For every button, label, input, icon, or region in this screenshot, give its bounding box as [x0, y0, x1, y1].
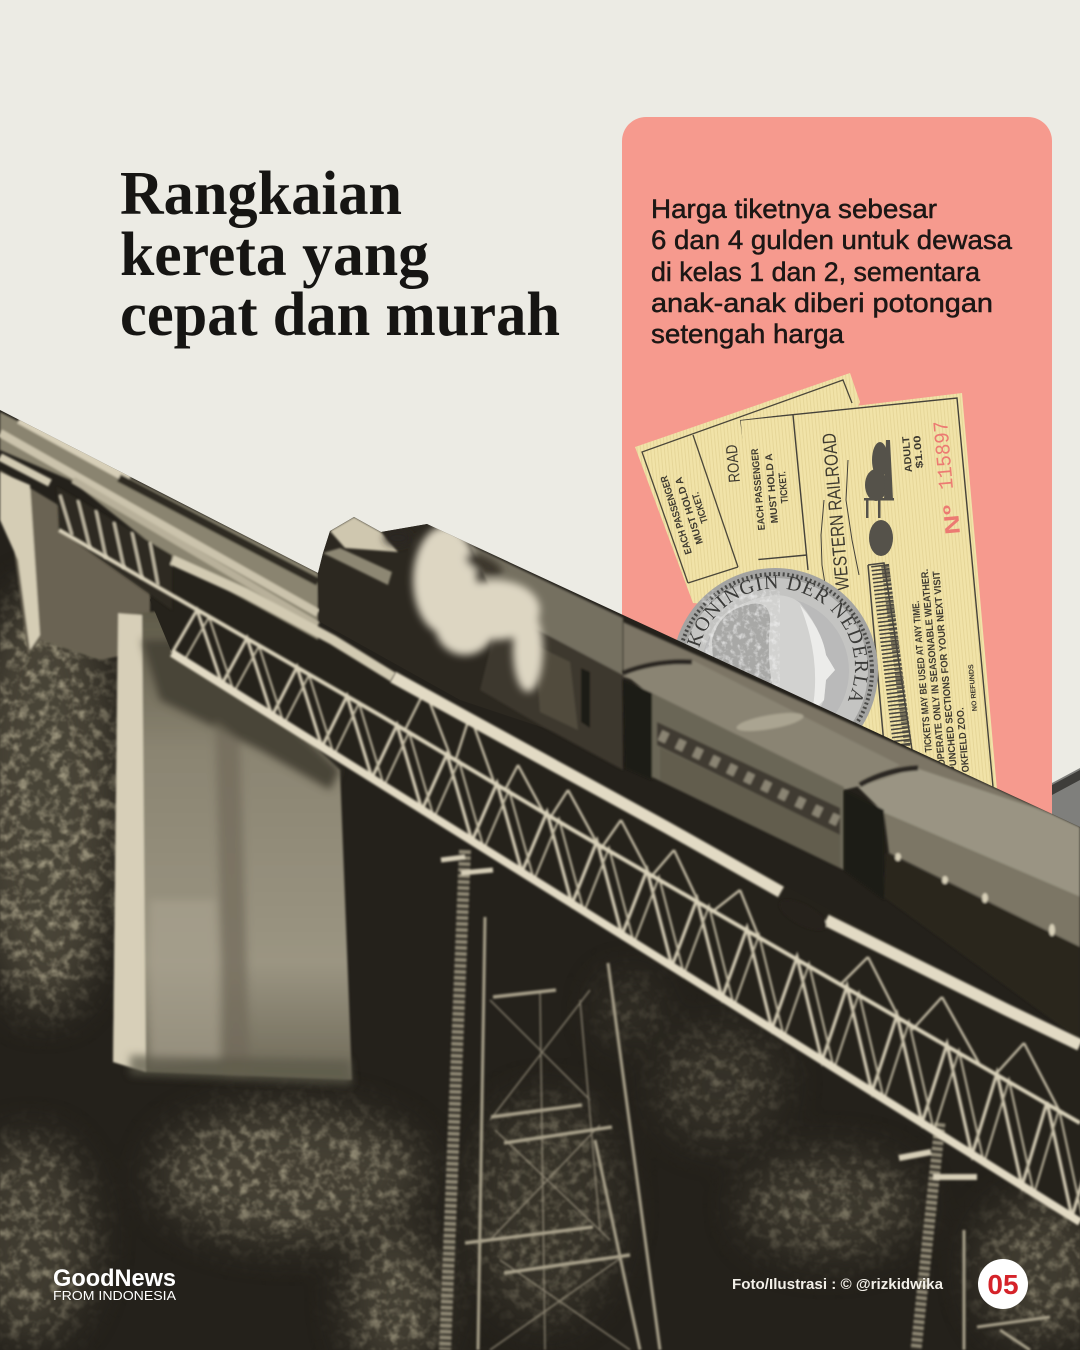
- foliage mid tone: [0, 595, 1080, 1350]
- carriage 2: [623, 622, 1050, 870]
- panel: ticket prices: [622, 117, 1052, 814]
- coin: [677, 568, 878, 726]
- back ticket: TICKET.: [690, 490, 711, 524]
- back ticket: MUST HOLD A: [674, 475, 706, 545]
- front ticket: TICKET.: [777, 471, 791, 504]
- front ticket: TICKETS MAY BE USED AT ANY TIME.: [911, 600, 935, 753]
- logo: GoodNews: GoodNews: [53, 1265, 176, 1292]
- title: Rangkaian: [120, 160, 402, 228]
- main stone pier: [113, 610, 352, 1085]
- truss web zigzag: [59, 530, 1080, 1225]
- front ticket: [740, 393, 997, 800]
- front ticket: OPERATE ONLY IN SEASONABLE WEATHER.: [920, 568, 948, 767]
- front ticket: WESTERN RAILROAD: [819, 432, 854, 591]
- photo: train on the viaduct: [0, 400, 1080, 1350]
- page number badge: 05: [987, 1269, 1019, 1300]
- front ticket: ADULT: [901, 436, 915, 473]
- building fragment: [1052, 768, 1080, 832]
- ticket serial number: [931, 420, 965, 536]
- front ticket: $1.00: [912, 434, 926, 469]
- smoke plume: [384, 526, 543, 692]
- foliage texture: [0, 590, 1080, 1350]
- page number badge: [978, 1259, 1028, 1309]
- panel body text: 6 dan 4 gulden untuk dewasa: [651, 225, 1013, 255]
- front ticket: MUST HOLD A: [764, 453, 781, 524]
- carriage 1: [470, 545, 623, 770]
- title: cepat dan murah: [120, 281, 560, 349]
- upper deck rails: [0, 412, 393, 677]
- front ticket: EACH PASSENGER: [750, 447, 768, 531]
- tower 2: [899, 1123, 1050, 1350]
- truss chords: [59, 530, 1080, 1123]
- panel body text: [651, 194, 1013, 349]
- ticket serial number: 115897: [931, 420, 960, 490]
- left stone pier: [0, 470, 150, 660]
- panel body text: di kelas 1 dan 2, sementara: [651, 257, 981, 287]
- locomotive: [318, 517, 536, 725]
- ticket engraving: train scene: [864, 440, 894, 556]
- title: kereta yang: [120, 221, 429, 289]
- deck shadow under the train: [150, 560, 1080, 1220]
- panel body text: setengah harga: [651, 319, 845, 349]
- panel body text: anak-anak diberi potongan: [651, 288, 993, 318]
- panel body text: Harga tiketnya sebesar: [651, 194, 937, 224]
- front ticket: PUNCHED SECTIONS FOR YOUR NEXT VISIT: [931, 571, 960, 773]
- ticket serial number: Nº: [939, 503, 965, 536]
- carriage 3: [842, 764, 1080, 948]
- back ticket: EACH PASSENGER: [659, 473, 695, 555]
- front ticket: OKFIELD ZOO.: [955, 707, 972, 773]
- queen portrait relief: [700, 590, 835, 706]
- logo: GoodNews: FROM INDONESIA: [53, 1289, 177, 1303]
- tower 1: [441, 850, 660, 1350]
- back ticket: ROAD: [724, 444, 744, 483]
- back ticket: [635, 373, 860, 610]
- front ticket: NO REFUNDS: [968, 664, 979, 711]
- photo credit: Foto/Ilustrasi : © @rizkidwika: [732, 1276, 944, 1293]
- photo base dark foliage: [0, 400, 1080, 1350]
- truss A-frames on the deck: [405, 690, 1060, 1112]
- title: [120, 160, 560, 349]
